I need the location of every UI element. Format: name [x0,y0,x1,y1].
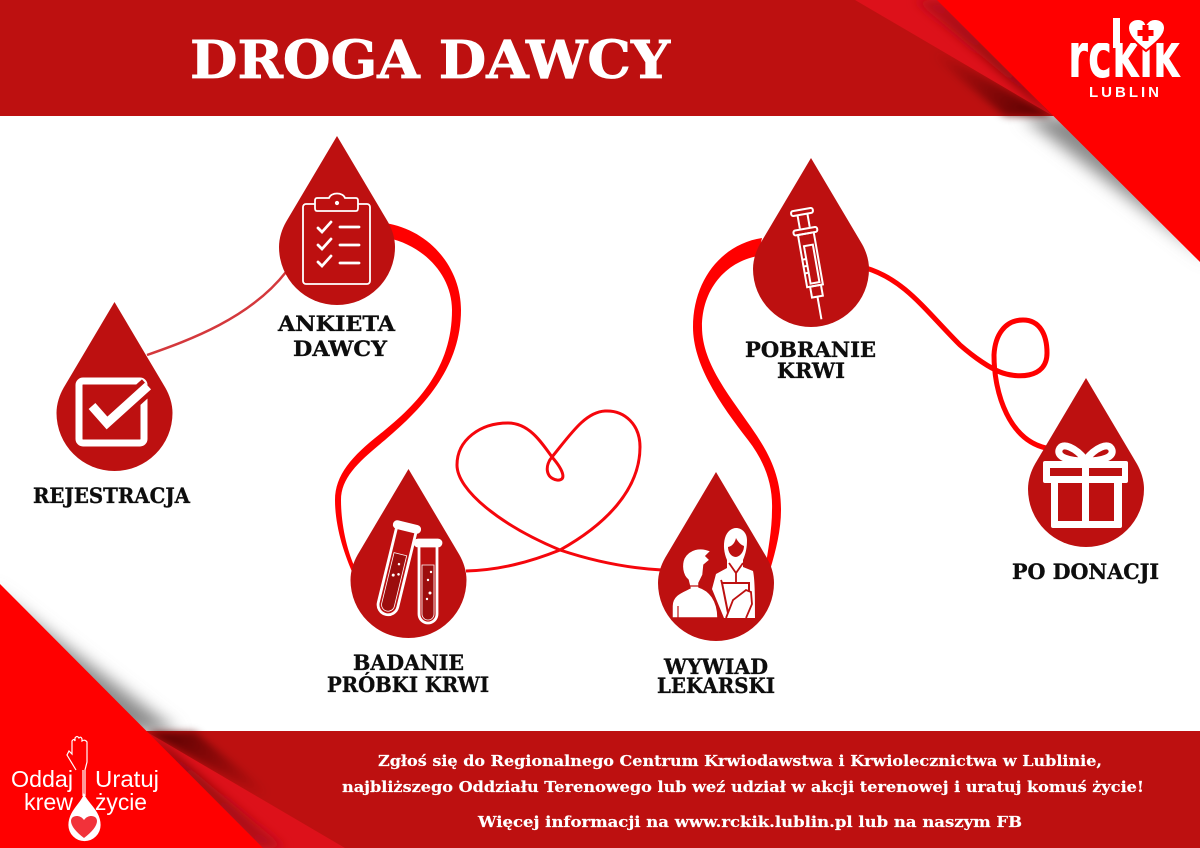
step: ankieta dawcy [277,136,395,362]
label: pobranie krwi: POBRANIE [745,338,876,363]
logo: oddaj krew uratuj zycie [11,736,159,840]
logo: oddaj krew uratuj zycie: życie [95,789,147,815]
step: wywiad lekarski [657,472,775,699]
footer band [0,584,1200,848]
ribbon: ankieta to badanie [335,223,461,576]
footer text: Zgłoś się do Regionalnego Centrum Krwiodawstwa i Krwiolecznictwa w Lublinie, [378,753,1102,770]
step: pobranie krwi [745,158,876,384]
label: ankieta dawcy: ANKIETA [277,312,395,337]
label: pobranie krwi [745,338,876,384]
logo: oddaj krew uratuj zycie: Uratuj [95,766,159,792]
label: pobranie krwi: KRWI [777,359,845,384]
footer text: najbliższego Oddziału Terenowego lub weź udział w akcji terenowej i uratuj komuś życie! [342,779,1144,796]
patient [672,549,718,618]
icon: doctor and patient [672,528,755,618]
step: rejestracja [33,302,190,509]
label: rejestracja: REJESTRACJA [33,484,190,509]
label: badanie probki krwi: PRÓBKI KRWI [327,671,489,698]
label: wywiad lekarski: LEKARSKI [657,674,775,699]
footer text: Więcej informacji na www.rckik.lublin.pl lub na naszym FB [477,814,1022,831]
ribbon: pobranie to po donacji with loop [866,268,1047,448]
title: DROGA DAWCY [190,30,671,91]
icon: gift box [1043,446,1128,528]
label: badanie probki krwi [327,651,489,698]
icon: clipboard [303,194,370,284]
icon: checkbox [79,381,148,443]
ribbon: wywiad to pobranie [693,238,781,570]
label: ankieta dawcy [277,312,395,362]
logo: oddaj krew uratuj zycie: krew [24,789,74,815]
clipboard and hand [722,583,749,618]
label: wywiad lekarski [657,655,775,699]
header band [0,0,1200,262]
ribbon: heart line [457,411,662,571]
label: badanie probki krwi: BADANIE [353,651,464,676]
corner shadow top right [1022,116,1200,262]
footer text [342,753,1144,831]
step: po donacji [1012,378,1159,585]
corner shadow bottom left [0,586,178,732]
label: wywiad lekarski: WYWIAD [663,655,768,680]
logo: rckik Lublin: LUBLIN [1089,84,1159,101]
icon: syringe [790,207,833,321]
label: po donacji: PO DONACJI [1012,560,1159,585]
icon: raised hand with drop [67,736,100,840]
doctor [712,528,755,618]
ribbon: rejestracja to ankieta [147,272,286,355]
step: badanie probki krwi [327,469,489,698]
label: ankieta dawcy: DAWCY [293,337,388,362]
icon: test tubes [373,521,441,623]
logo: oddaj krew uratuj zycie: Oddaj [11,766,73,792]
